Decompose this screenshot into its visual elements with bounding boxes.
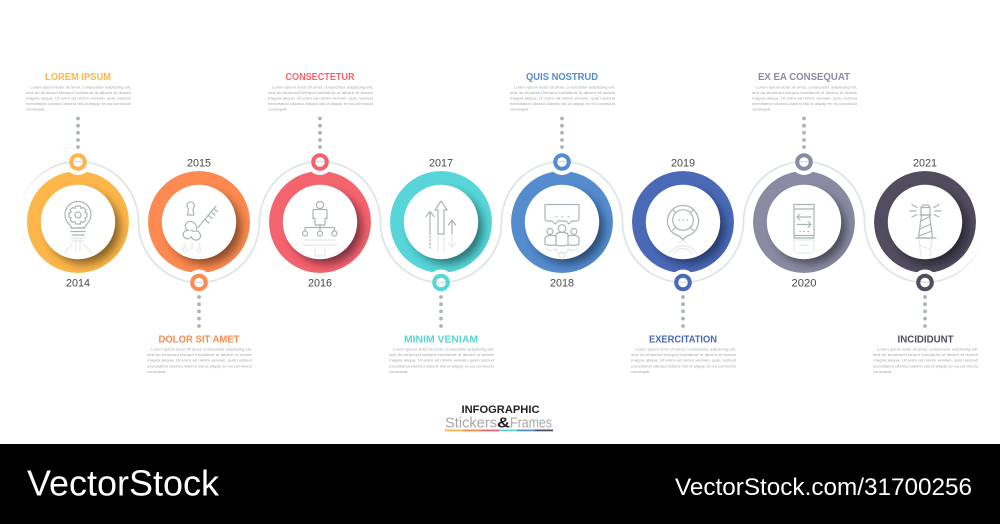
circle 2015 xyxy=(148,171,250,273)
text block: lorem ipsum: magna aliqua. Ut enim ad minim veniam, quis nostrud xyxy=(26,96,131,100)
text block: minim veniam: Lorem ipsum dolor sit amet, consectetur adipiscing elit, xyxy=(393,346,494,352)
logo: infographic stickers and frames: Frames xyxy=(510,414,552,432)
year labels: 2021 xyxy=(913,158,937,170)
circle 2019 xyxy=(632,171,734,273)
circle 2017 xyxy=(390,171,492,273)
text block: dolor sit amet: sed do eiusmod tempor incididunt ut labore et dolore xyxy=(147,352,253,357)
title: quis nostrud: QUIS NOSTRUD xyxy=(526,72,598,83)
title: exercitation: EXERCITATION xyxy=(649,334,717,346)
icon: lifebuoy chat xyxy=(667,206,698,254)
text block: lorem ipsum: Lorem ipsum dolor sit amet, consectetur adipiscing elit, xyxy=(30,84,131,90)
footer bar: VectorStock xyxy=(27,462,220,504)
text block: minim veniam xyxy=(389,346,495,374)
circle 2021 xyxy=(874,171,976,273)
text block: dolor sit amet xyxy=(147,346,253,374)
connecting wave line xyxy=(18,162,986,282)
text block: consectetur: consequat. xyxy=(268,106,288,112)
year labels: 2016 xyxy=(308,278,332,290)
text block: exercitation: sed do eiusmod tempor incididunt ut labore et dolore xyxy=(631,352,737,357)
year labels: 2018 xyxy=(550,278,574,290)
text block: lorem ipsum: exercitation ullamco laboris nisi ut aliquip ex ea commodo xyxy=(26,101,132,106)
text block: lorem ipsum xyxy=(26,84,132,112)
logo: infographic stickers and frames: Stickers xyxy=(445,414,497,432)
text block: quis nostrud xyxy=(510,84,616,112)
text block: quis nostrud: exercitation ullamco laboris nisi ut aliquip ex ea commodo xyxy=(510,101,616,106)
logo: infographic stickers and frames: INFOGRAPHIC xyxy=(462,404,540,416)
footer bar: VectorStock.com/31700256 xyxy=(675,474,972,501)
text block: incididunt: Lorem ipsum dolor sit amet, consectetur adipiscing elit, xyxy=(877,346,978,352)
circle 2014 xyxy=(27,171,129,273)
text block: minim veniam: consequat. xyxy=(389,369,409,374)
title: ex ea consequat: EX EA CONSEQUAT xyxy=(758,72,850,83)
logo: infographic stickers and frames xyxy=(445,404,553,432)
text block: incididunt xyxy=(873,346,979,374)
text block: exercitation: exercitation ullamco laboris nisi ut aliquip ex ea commodo xyxy=(631,363,737,368)
text block: quis nostrud: sed do eiusmod tempor incididunt ut labore et dolore xyxy=(510,90,616,95)
circle 2020 xyxy=(753,171,855,273)
title: incididunt: INCIDIDUNT xyxy=(898,334,954,346)
text block: incididunt: sed do eiusmod tempor incididunt ut labore et dolore xyxy=(873,352,979,357)
icon: phone with transfer arrows xyxy=(794,204,814,253)
text block: dolor sit amet: magna aliqua. Ut enim ad minim veniam, quis nostrud xyxy=(147,358,252,363)
text block: exercitation: Lorem ipsum dolor sit amet, consectetur adipiscing elit, xyxy=(635,346,736,352)
title: minim veniam: MINIM VENIAM xyxy=(404,334,478,346)
text block: lorem ipsum: consequat. xyxy=(26,106,46,112)
circle 2016 xyxy=(269,171,371,273)
text block: minim veniam: sed do eiusmod tempor incididunt ut labore et dolore xyxy=(389,352,495,357)
text block: minim veniam: exercitation ullamco laboris nisi ut aliquip ex ea commodo xyxy=(389,363,495,368)
year labels: 2017 xyxy=(429,158,453,170)
icon: person with org chart xyxy=(302,201,337,256)
text block: consectetur: sed do eiusmod tempor incididunt ut labore et dolore xyxy=(268,90,374,95)
text block: minim veniam: magna aliqua. Ut enim ad minim veniam, quis nostrud xyxy=(389,358,494,363)
text block: lorem ipsum: sed do eiusmod tempor incididunt ut labore et dolore xyxy=(26,90,132,95)
text block: quis nostrud: magna aliqua. Ut enim ad minim veniam, quis nostrud xyxy=(510,96,615,100)
text block: incididunt: exercitation ullamco laboris nisi ut aliquip ex ea commodo xyxy=(873,363,979,368)
text block: exercitation xyxy=(631,346,737,374)
text block: exercitation: consequat. xyxy=(631,369,651,374)
ring notches xyxy=(65,149,938,296)
year labels: 2019 xyxy=(671,158,695,170)
year labels: 2014 xyxy=(66,278,90,290)
marker rings xyxy=(71,155,932,289)
text block: dolor sit amet: exercitation ullamco laboris nisi ut aliquip ex ea commodo xyxy=(147,363,253,368)
icon: speech bubble over audience xyxy=(545,204,579,258)
dotted connectors xyxy=(76,117,927,328)
text block: ex ea consequat: magna aliqua. Ut enim ad minim veniam, quis nostrud xyxy=(752,96,857,100)
year labels: 2020 xyxy=(792,278,816,290)
text block: ex ea consequat: exercitation ullamco laboris nisi ut aliquip ex ea commodo xyxy=(752,101,858,106)
text block: ex ea consequat: consequat. xyxy=(752,106,772,112)
text block: consectetur: Lorem ipsum dolor sit amet, consectetur adipiscing elit, xyxy=(272,84,373,90)
year labels: 2015 xyxy=(187,158,211,170)
text block: incididunt: consequat. xyxy=(873,369,893,374)
title: lorem ipsum: LOREM IPSUM xyxy=(45,72,111,83)
text block: consectetur: exercitation ullamco laboris nisi ut aliquip ex ea commodo xyxy=(268,101,374,106)
icon: key and keyhole xyxy=(183,202,218,253)
text block: dolor sit amet: consequat. xyxy=(147,369,167,374)
text block: ex ea consequat: Lorem ipsum dolor sit amet, consectetur adipiscing elit, xyxy=(756,84,857,90)
text block: dolor sit amet: Lorem ipsum dolor sit amet, consectetur adipiscing elit, xyxy=(151,346,252,352)
text block: consectetur xyxy=(268,84,374,112)
text block: quis nostrud: consequat. xyxy=(510,106,530,112)
logo: infographic stickers and frames: & xyxy=(497,414,510,432)
icon: rising arrows xyxy=(426,201,456,252)
title: dolor sit amet: DOLOR SIT AMET xyxy=(158,334,240,346)
year labels xyxy=(66,158,937,290)
title: consectetur: CONSECTETUR xyxy=(286,72,355,83)
text block: exercitation: magna aliqua. Ut enim ad minim veniam, quis nostrud xyxy=(631,358,736,363)
footer bar xyxy=(0,444,1000,524)
text block: consectetur: magna aliqua. Ut enim ad minim veniam, quis nostrud xyxy=(268,96,373,100)
circle 2018 xyxy=(511,171,613,273)
text block: incididunt: magna aliqua. Ut enim ad minim veniam, quis nostrud xyxy=(873,358,978,363)
text block: quis nostrud: Lorem ipsum dolor sit amet, consectetur adipiscing elit, xyxy=(514,84,615,90)
icon: light bulb with gear xyxy=(65,202,91,253)
text block: ex ea consequat xyxy=(752,84,858,112)
text block: ex ea consequat: sed do eiusmod tempor incididunt ut labore et dolore xyxy=(752,90,858,95)
icon: lighthouse xyxy=(910,204,941,256)
